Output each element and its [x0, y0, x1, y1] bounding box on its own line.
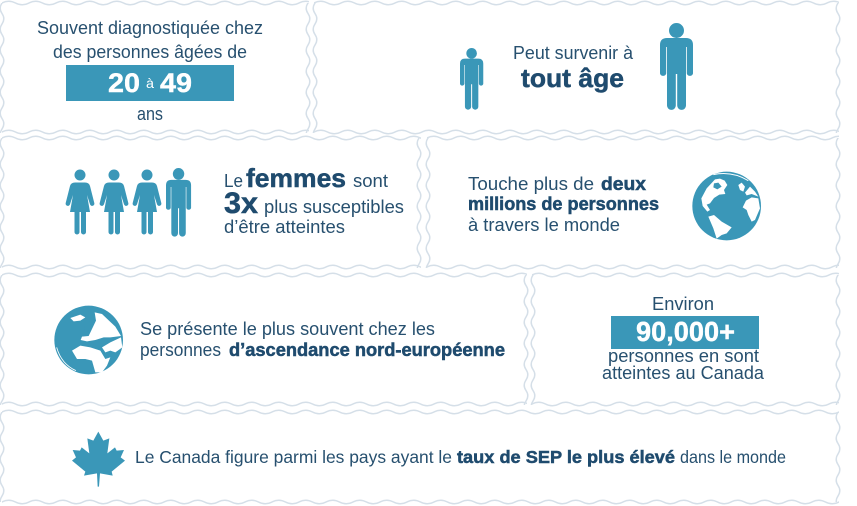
text: people affected in Canada: personnes en sont	[608, 346, 759, 366]
text: women 3x more likely: femmes	[246, 163, 346, 193]
text: people affected in Canada	[602, 346, 765, 383]
callout: 20 to 49: à	[146, 75, 154, 91]
text: diagnosed among people aged: des personnes âgées de	[53, 42, 247, 62]
text: people affected in Canada: atteintes au Canada	[602, 363, 765, 383]
callout: 90,000+: 90,000+	[636, 316, 735, 347]
text: about: Environ	[652, 294, 714, 314]
text: women 3x more likely: d’être atteintes	[224, 217, 345, 237]
callout: 20 to 49	[66, 65, 234, 101]
icon: small person	[460, 48, 483, 110]
icon: three women and one man	[66, 168, 191, 237]
text: women 3x more likely	[224, 163, 404, 237]
panel: age at diagnosis	[37, 18, 263, 124]
icon: globe Americas	[692, 172, 761, 240]
text: more than two million people: deux	[601, 174, 646, 194]
text: women 3x more likely: 3x	[224, 187, 258, 220]
text: can occur at any age	[513, 43, 634, 93]
text: Canada among highest rates of MS: dans le monde	[680, 447, 786, 467]
text: Canada among highest rates of MS: taux de SEP le plus élevé	[457, 447, 675, 467]
text: Canada among highest rates of MS	[135, 447, 786, 467]
text: women 3x more likely: Le	[224, 171, 243, 191]
callout: 20 to 49: 20	[108, 68, 140, 98]
callout: 90,000+	[611, 316, 759, 349]
text: northern European ancestry	[140, 319, 505, 360]
text: diagnosed among people aged	[37, 18, 263, 62]
text: more than two million people: à travers le monde	[468, 215, 620, 235]
text: years: ans	[137, 104, 163, 124]
panel: women three times more likely	[66, 163, 404, 237]
icon: maple leaf	[72, 432, 125, 487]
panel: any age	[460, 23, 693, 110]
text: northern European ancestry: personnes	[140, 340, 221, 360]
text: women 3x more likely: plus susceptibles	[264, 197, 404, 217]
panel: 90,000 in Canada	[602, 294, 765, 383]
text: northern European ancestry: Se présente le plus souvent chez les	[140, 319, 435, 339]
text: diagnosed among people aged: Souvent diagnostiquée chez	[37, 18, 263, 38]
text: can occur at any age: Peut survenir à	[513, 43, 634, 63]
text: northern European ancestry: d’ascendance nord-européenne	[229, 340, 505, 360]
text: more than two million people: millions de personnes	[468, 194, 659, 214]
callout: 20 to 49: 49	[160, 68, 192, 98]
icon: tall person	[660, 23, 693, 110]
panel: Canada highest rate	[72, 432, 786, 487]
text: Canada among highest rates of MS: Le Canada figure parmi les pays ayant le	[135, 447, 452, 467]
icon: globe Europe and Africa	[54, 306, 123, 374]
text: more than two million people	[468, 174, 659, 235]
text: more than two million people: Touche plus de	[468, 174, 594, 194]
panel: two million worldwide	[468, 172, 761, 240]
panel: northern European ancestry	[54, 306, 505, 374]
text: women 3x more likely: sont	[353, 171, 388, 191]
text: can occur at any age: tout âge	[521, 63, 624, 93]
